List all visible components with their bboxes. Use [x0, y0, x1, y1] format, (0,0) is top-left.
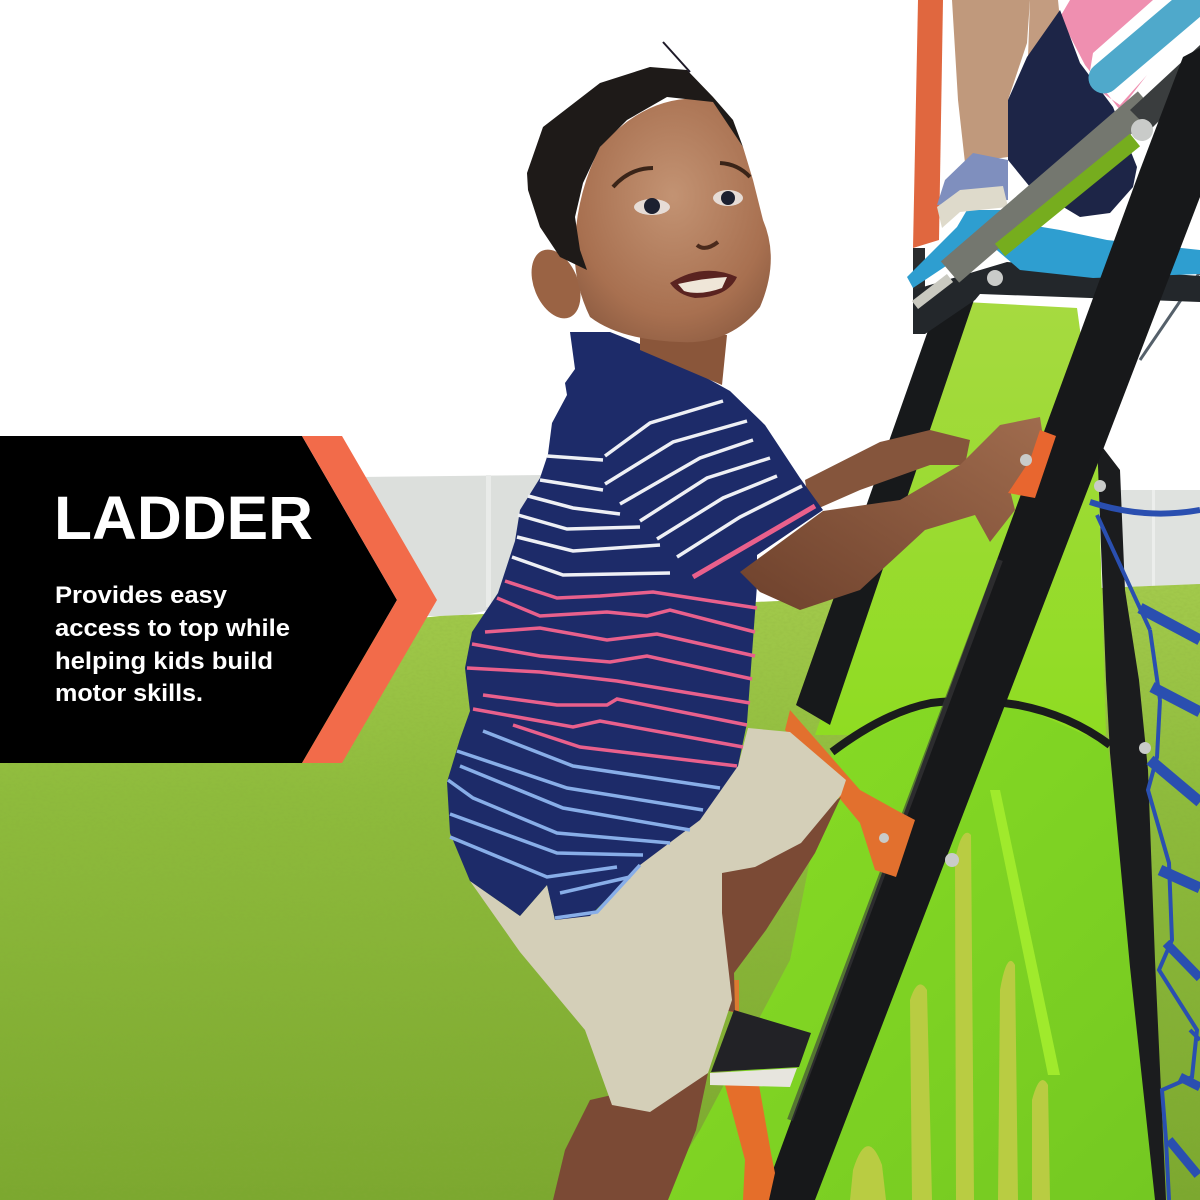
climbing net [1090, 502, 1200, 1200]
grass lawn [0, 584, 1200, 1200]
shorts [470, 728, 846, 1112]
lower leg [553, 1073, 708, 1200]
far arm [805, 430, 970, 512]
callout body text: access to top while [55, 615, 290, 642]
blue stripes [448, 731, 720, 918]
callout heading: LADDER [54, 484, 313, 552]
dark platform frame [913, 262, 1200, 334]
slide pattern marks [850, 833, 1050, 1200]
eyes [613, 163, 750, 215]
callout body text: motor skills. [55, 680, 203, 707]
pink stripes [467, 506, 815, 766]
callout: ladder [0, 436, 437, 763]
lower orange rung [725, 1085, 775, 1200]
teal handle [1104, 0, 1200, 78]
upper dark rail [1130, 45, 1200, 130]
grip bolt [1020, 454, 1032, 466]
seated child on platform [937, 0, 1153, 228]
light green fold streak [990, 790, 1060, 1075]
child pink shirt [1060, 0, 1153, 110]
ear [522, 242, 590, 326]
orange hand grip [1008, 430, 1056, 498]
callout body text: Provides easy [55, 582, 228, 609]
white stripes [512, 401, 802, 575]
neck [640, 325, 727, 385]
callout body text [55, 582, 290, 707]
stray hair [663, 42, 690, 72]
rear left beam [796, 288, 978, 725]
striped shirt [447, 332, 823, 920]
play set structure [657, 0, 1200, 1200]
orange ladder rung [785, 710, 915, 877]
background fence [360, 475, 1200, 616]
shoe [710, 1010, 811, 1087]
nose [697, 242, 718, 248]
blue platform [907, 210, 1200, 288]
bolts [879, 119, 1153, 867]
rear right post [1097, 440, 1166, 1200]
sky background [0, 0, 1200, 620]
child shoe [937, 153, 1008, 205]
arch tube [832, 701, 1110, 752]
orange upright pole [913, 0, 943, 248]
grey diagonal rail [950, 102, 1147, 272]
face [575, 99, 771, 342]
lower green slide panel [657, 703, 1155, 1200]
callout orange chevron [302, 436, 437, 763]
boy climbing [447, 42, 1045, 1200]
rope to platform [1140, 272, 1200, 360]
smile [670, 271, 737, 298]
upper green slide panel [815, 302, 1106, 735]
child navy shorts [1008, 10, 1137, 217]
near arm and hand [740, 417, 1045, 610]
near leg [722, 797, 841, 1012]
child shin [952, 0, 1030, 163]
main ladder beam [762, 48, 1200, 1200]
beam highlight [790, 560, 1000, 1120]
silver bottom rod [915, 278, 950, 305]
green rail strip [1000, 140, 1135, 250]
callout black panel [0, 436, 397, 763]
callout body text: helping kids build [55, 648, 273, 675]
hair [527, 67, 743, 270]
